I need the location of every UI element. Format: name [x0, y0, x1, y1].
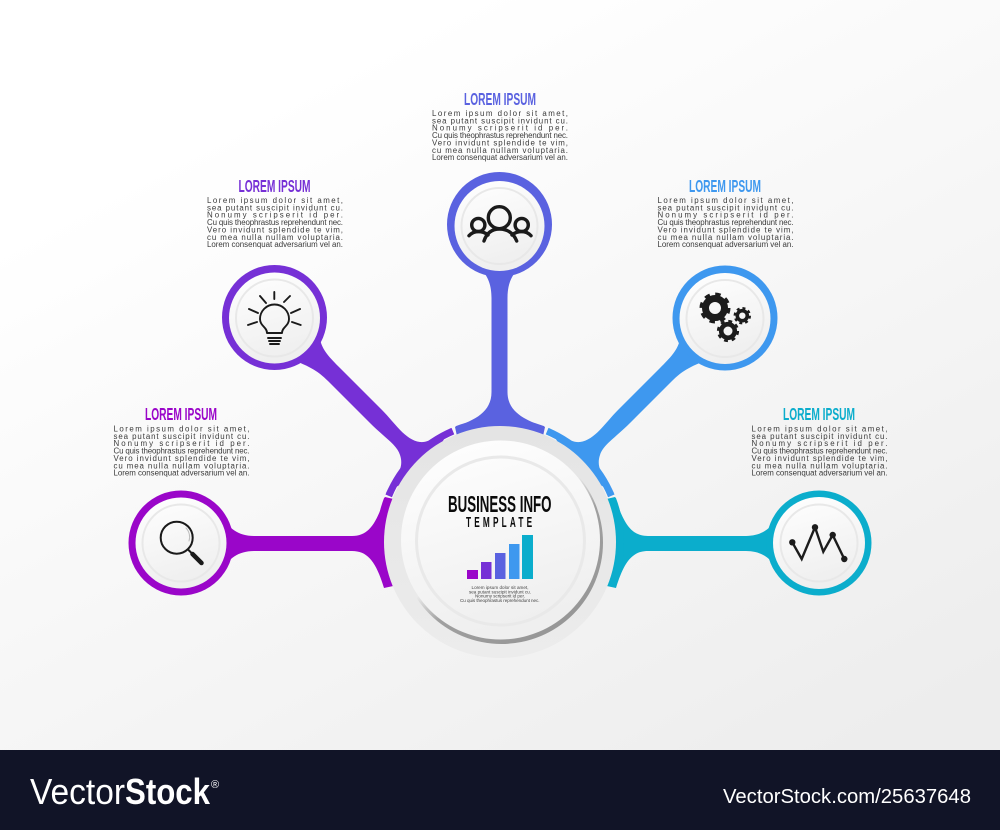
footer logo: [30, 771, 219, 812]
bar chart: [467, 535, 533, 579]
node: chart: [766, 490, 872, 596]
text block: team: Lorem consenquat adversarium vel an.: [432, 153, 568, 162]
text block: search: Cu quis theophrastus reprehendunt nec.: [114, 447, 250, 456]
footer image id: VectorStock.com/25637648: [723, 786, 971, 808]
text block: team: sea putant suscipit invidunt cu.: [432, 116, 568, 125]
footer logo: Stock: [125, 771, 211, 812]
footer bar: [0, 750, 1000, 830]
node: search: [128, 490, 234, 596]
icon: light bulb: [248, 292, 301, 344]
icon: magnifier: [161, 522, 202, 563]
text block: idea: cu mea nulla nullam voluptaria.: [207, 233, 343, 242]
hub caption: Lorem ipsum dolor sit amet,: [472, 585, 528, 590]
text block: idea: Vero invidunt splendide te vim,: [207, 225, 343, 234]
hub caption: sea putant suscipit invidunt cu.: [469, 589, 531, 594]
text block: idea: Cu quis theophrastus reprehendunt nec.: [207, 218, 343, 227]
node: team: [447, 172, 552, 277]
hub caption: Nonumy scripserit id per.: [475, 594, 525, 599]
heading: team: LOREM IPSUM: [464, 89, 536, 109]
text block: team: Nonumy scripserit id per.: [432, 124, 568, 133]
text block: team: Lorem ipsum dolor sit amet,: [432, 109, 568, 118]
text block: settings: sea putant suscipit invidunt cu.: [658, 203, 794, 212]
text block: idea: [207, 196, 343, 249]
central hub: [384, 426, 616, 658]
icon: line chart: [789, 524, 848, 562]
text block: settings: Nonumy scripserit id per.: [658, 211, 794, 220]
text block: settings: Lorem ipsum dolor sit amet,: [658, 196, 794, 205]
footer logo: ®: [211, 779, 219, 791]
text block: idea: Lorem consenquat adversarium vel an.: [207, 240, 343, 249]
text block: search: sea putant suscipit invidunt cu.: [114, 432, 250, 441]
heading: idea: LOREM IPSUM: [238, 176, 310, 196]
text block: chart: Cu quis theophrastus reprehendunt nec.: [752, 447, 888, 456]
icon: gears: [702, 294, 750, 341]
text block: search: [114, 424, 250, 478]
text block: settings: [658, 196, 794, 249]
heading: chart: LOREM IPSUM: [783, 404, 855, 424]
connector: search branch: [222, 497, 398, 588]
connector: chart branch: [602, 497, 778, 588]
hub title: BUSINESS INFO: [448, 492, 552, 518]
text block: settings: cu mea nulla nullam voluptaria.: [658, 233, 794, 242]
text block: settings: Cu quis theophrastus reprehendunt nec.: [658, 218, 794, 227]
text block: chart: Nonumy scripserit id per.: [752, 439, 888, 448]
footer logo: Vector: [30, 771, 125, 812]
text block: team: Vero invidunt splendide te vim,: [432, 138, 568, 147]
text block: search: Lorem ipsum dolor sit amet,: [114, 424, 250, 434]
text block: team: cu mea nulla nullam voluptaria.: [432, 146, 568, 155]
hub subtitle: TEMPLATE: [466, 513, 535, 531]
text block: search: Vero invidunt splendide te vim,: [114, 454, 250, 463]
connector: team branch: [455, 270, 545, 450]
text block: chart: cu mea nulla nullam voluptaria.: [752, 461, 888, 470]
text block: search: Nonumy scripserit id per.: [114, 439, 250, 448]
text block: settings: Vero invidunt splendide te vim,: [658, 225, 794, 234]
text block: team: [432, 109, 568, 162]
text block: idea: Nonumy scripserit id per.: [207, 211, 343, 220]
node: idea: [222, 265, 327, 370]
connector: settings branch: [547, 339, 702, 496]
hub caption: Cu quis theophrastus reprehendunt nec.: [460, 598, 540, 603]
heading: search: LOREM IPSUM: [145, 404, 217, 424]
icon: people: [469, 207, 531, 241]
text block: chart: Vero invidunt splendide te vim,: [752, 454, 888, 463]
text block: chart: [752, 424, 888, 478]
node: settings: [672, 266, 778, 370]
text block: settings: Lorem consenquat adversarium vel an.: [658, 240, 794, 249]
text block: chart: Lorem consenquat adversarium vel an.: [752, 469, 888, 478]
text block: chart: Lorem ipsum dolor sit amet,: [752, 424, 888, 434]
heading: settings: LOREM IPSUM: [689, 176, 761, 196]
connector: idea branch: [298, 339, 453, 496]
hub caption: [460, 585, 540, 603]
text block: idea: Lorem ipsum dolor sit amet,: [207, 196, 343, 205]
text block: chart: sea putant suscipit invidunt cu.: [752, 432, 888, 441]
text block: search: cu mea nulla nullam voluptaria.: [114, 461, 250, 470]
text block: team: Cu quis theophrastus reprehendunt nec.: [432, 131, 568, 140]
text block: search: Lorem consenquat adversarium vel an.: [114, 469, 250, 478]
text block: idea: sea putant suscipit invidunt cu.: [207, 203, 343, 212]
